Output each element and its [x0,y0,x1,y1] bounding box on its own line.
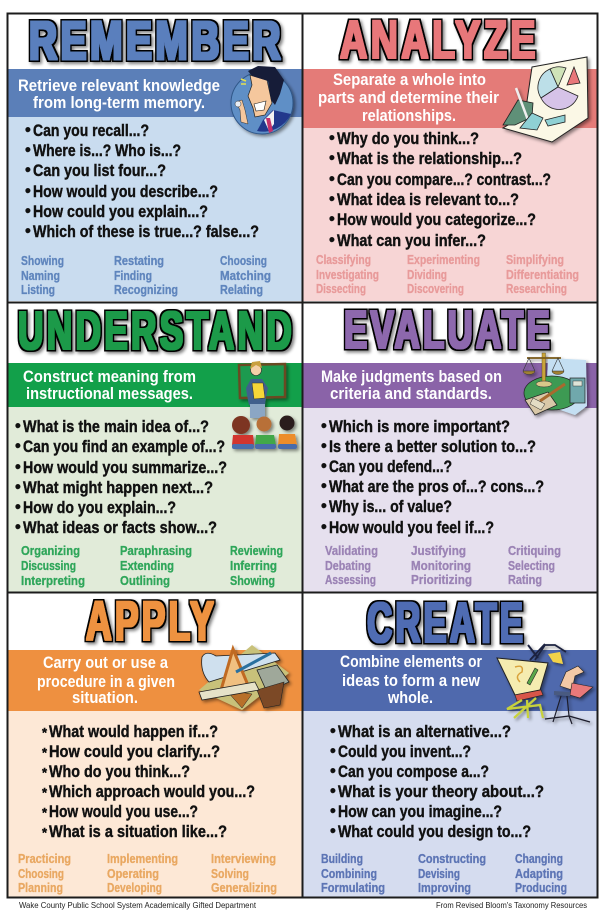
question list: understand: What is the main idea of...? [23,418,209,436]
verbs: apply: Solving [211,867,249,881]
question list: evaluate: • [321,497,327,515]
icon: pie chart on paper [503,57,588,142]
question list: evaluate: • [321,477,327,495]
question list: remember: • [25,161,31,179]
verbs: evaluate: Critiquing [508,544,561,558]
verbs: evaluate: Justifying [411,544,466,558]
definition: analyze: relationships. [362,107,456,125]
question list: apply: What is a situation like...? [49,823,227,841]
question list: apply: How would you use...? [49,803,198,821]
verbs: understand: Extending [120,559,174,573]
question list: evaluate: • [321,518,327,536]
question list: create [330,722,544,841]
verbs: understand: Paraphrasing [120,544,192,558]
verbs: apply: Practicing [18,852,71,866]
panel: understand [8,301,302,593]
question list: create: What is an alternative...? [338,723,511,741]
question list: analyze: What idea is relevant to...? [337,191,519,209]
definition: analyze: parts and determine their [318,89,500,107]
question list: understand [15,417,227,537]
verbs: analyze: Discovering [407,282,464,296]
verbs: analyze: Researching [506,282,567,296]
verbs: apply: Interviewing [211,852,276,866]
verbs: create: Combining [321,867,377,881]
question list: analyze: How would you categorize...? [337,211,536,229]
verbs: create: Adapting [515,867,563,881]
question list: apply: Who do you think...? [49,763,190,781]
verbs: evaluate: Prioritizing [411,573,472,587]
question list: remember: Where is...? Who is...? [33,142,181,160]
question list: remember: • [25,222,31,240]
verbs: apply: Generalizing [211,881,277,895]
icon: thinking man [231,66,293,134]
verbs: create [321,852,567,895]
definition: create: whole. [387,689,433,707]
definition: apply: situation. [72,689,138,707]
question list: understand: • [15,478,21,496]
question list: remember: • [25,202,31,220]
verbs: apply: Developing [107,881,162,895]
question list: apply: * [42,745,48,760]
verbs: analyze: Simplifying [506,253,564,267]
question list: remember: • [25,182,31,200]
question list: evaluate: Why is... of value? [329,498,452,516]
verbs: analyze: Differentiating [506,268,579,282]
question list: understand: • [15,437,21,455]
question list: understand: How would you summarize...? [23,459,227,477]
definition: apply [37,654,175,707]
question list: apply: * [42,825,48,840]
panel: evaluate [302,300,597,593]
question list: remember: • [25,121,31,139]
definition: create: Combine elements or [340,653,482,671]
question list: create: • [330,782,336,800]
verbs: remember: Listing [21,283,55,297]
question list: analyze: • [329,129,335,147]
question list: remember: How could you explain...? [33,203,208,221]
verbs: apply: Planning [18,881,63,895]
definition: evaluate: criteria and standards. [330,385,492,403]
question list: understand: • [15,417,21,435]
definition: understand: Construct meaning from [23,368,196,386]
verbs: apply [18,852,277,895]
verbs: create: Changing [515,852,563,866]
question list: analyze [329,129,551,250]
question list: evaluate: Is there a better solution to...? [329,438,536,456]
icon: teacher and students [232,361,297,449]
question list: analyze: What is the relationship...? [337,150,522,168]
verbs: understand: Reviewing [230,544,283,558]
verbs: create: Formulating [321,881,385,895]
question list: understand: What ideas or facts show...? [23,519,217,537]
verbs: evaluate: Rating [508,573,542,587]
icon: blueprint and tools [199,645,289,710]
question list: evaluate: • [321,437,327,455]
definition: remember [18,77,220,112]
definition: create: ideas to form a new [342,672,480,690]
question list: apply: * [42,765,48,780]
question list: understand: What might happen next...? [23,479,213,497]
verbs: apply: Choosing [18,867,64,881]
verbs: remember [21,254,271,297]
title: remember: REMEMBER [29,11,284,71]
definition: apply: Carry out or use a [43,654,169,672]
question list: evaluate: Can you defend...? [329,458,452,476]
question list: create: Can you compose a...? [338,763,489,781]
icon: scales and gavel [523,353,587,415]
verbs: understand: Outlining [120,574,170,588]
title: understand: UNDERSTAND [18,301,295,361]
question list: apply [42,723,255,841]
footer: source right: From Revised Bloom's Taxonomy Resources [436,901,587,910]
question list: analyze: Can you compare...? contrast...? [337,171,551,189]
question list: analyze: Why do you think...? [337,130,479,148]
definition: analyze: Separate a whole into [333,71,486,89]
question list: understand: • [15,518,21,536]
panel: apply [8,589,302,897]
panel: create [302,591,597,897]
verbs: remember: Matching [220,269,271,283]
definition: remember: from long-term memory. [33,94,205,112]
verbs: evaluate [325,544,561,587]
verbs: evaluate: Selecting [508,559,555,573]
question list: create: • [330,802,336,820]
verbs: analyze [316,253,579,296]
question list: remember: Can you list four...? [33,162,166,180]
question list: evaluate: Which is more important? [329,418,510,436]
verbs: analyze: Dissecting [316,282,366,296]
question list: create: • [330,722,336,740]
question list: create: Could you invent...? [338,743,471,761]
title: apply: APPLY [86,589,217,652]
definition: evaluate [321,368,502,403]
question list: evaluate: • [321,417,327,435]
question list: understand: • [15,498,21,516]
question list: remember: How would you describe...? [33,183,218,201]
verbs: evaluate: Validating [325,544,378,558]
verbs: remember: Finding [114,269,152,283]
verbs: remember: Relating [220,283,263,297]
definition: analyze [318,71,500,125]
question list: analyze: • [329,190,335,208]
definition: understand [23,368,196,403]
question list: evaluate: How would you feel if...? [329,519,494,537]
definition: evaluate: Make judgments based on [321,368,502,386]
question list: create: How can you imagine...? [338,803,502,821]
question list: understand: Can you find an example of...? [23,438,225,456]
question list: evaluate: • [321,457,327,475]
question list: remember [25,121,259,241]
verbs: create: Building [321,852,363,866]
verbs: remember: Recognizing [114,283,178,297]
verbs: create: Improving [418,881,471,895]
panel: remember [8,11,302,302]
question list: analyze: • [329,149,335,167]
question list: evaluate: What are the pros of...? cons...? [329,478,544,496]
verbs: evaluate: Assessing [325,573,376,587]
panel: analyze [302,10,597,302]
question list: apply: What would happen if...? [49,723,218,741]
verbs: remember: Showing [21,254,64,268]
verbs: remember: Restating [114,254,164,268]
verbs: analyze: Investigating [316,268,379,282]
verbs: understand [21,544,283,588]
footer: source left: Wake County Public School System Academically Gifted Department [19,901,257,910]
verbs: evaluate: Monitoring [411,559,471,573]
question list: create: • [330,742,336,760]
verbs: remember: Choosing [220,254,267,268]
verbs: remember: Naming [21,269,60,283]
definition: create [340,653,482,707]
question list: understand: How do you explain...? [23,499,176,517]
verbs: create: Producing [515,881,567,895]
question list: remember: Can you recall...? [33,122,149,140]
question list: analyze: • [329,231,335,249]
verbs: analyze: Classifying [316,253,371,267]
question list: analyze: • [329,170,335,188]
question list: apply: * [42,785,48,800]
icon: artist at easel [497,644,593,724]
question list: remember: • [25,141,31,159]
verbs: understand: Inferring [230,559,277,573]
question list: apply: * [42,725,48,740]
question list: create: What could you design to...? [338,823,531,841]
verbs: create: Devising [418,867,460,881]
definition: understand: instructional messages. [26,385,193,403]
verbs: understand: Organizing [21,544,80,558]
verbs: understand: Discussing [21,559,76,573]
question list: evaluate [321,417,544,537]
verbs: apply: Implementing [107,852,178,866]
question list: apply: * [42,805,48,820]
question list: analyze: • [329,210,335,228]
verbs: understand: Interpreting [21,574,85,588]
verbs: understand: Showing [230,574,275,588]
verbs: analyze: Experimenting [407,253,480,267]
question list: apply: Which approach would you...? [49,783,255,801]
question list: create: • [330,762,336,780]
verbs: apply: Operating [107,867,159,881]
question list: understand: • [15,458,21,476]
verbs: analyze: Dividing [407,268,447,282]
question list: analyze: What can you infer...? [337,232,486,250]
question list: create: What is your theory about...? [338,783,544,801]
question list: apply: How could you clarify...? [49,743,220,761]
verbs: evaluate: Debating [325,559,371,573]
definition: apply: procedure in a given [37,673,175,691]
definition: remember: Retrieve relevant knowledge [18,77,220,95]
question list: create: • [330,822,336,840]
question list: remember: Which of these is true...? false...? [33,223,259,241]
verbs: create: Constructing [418,852,486,866]
